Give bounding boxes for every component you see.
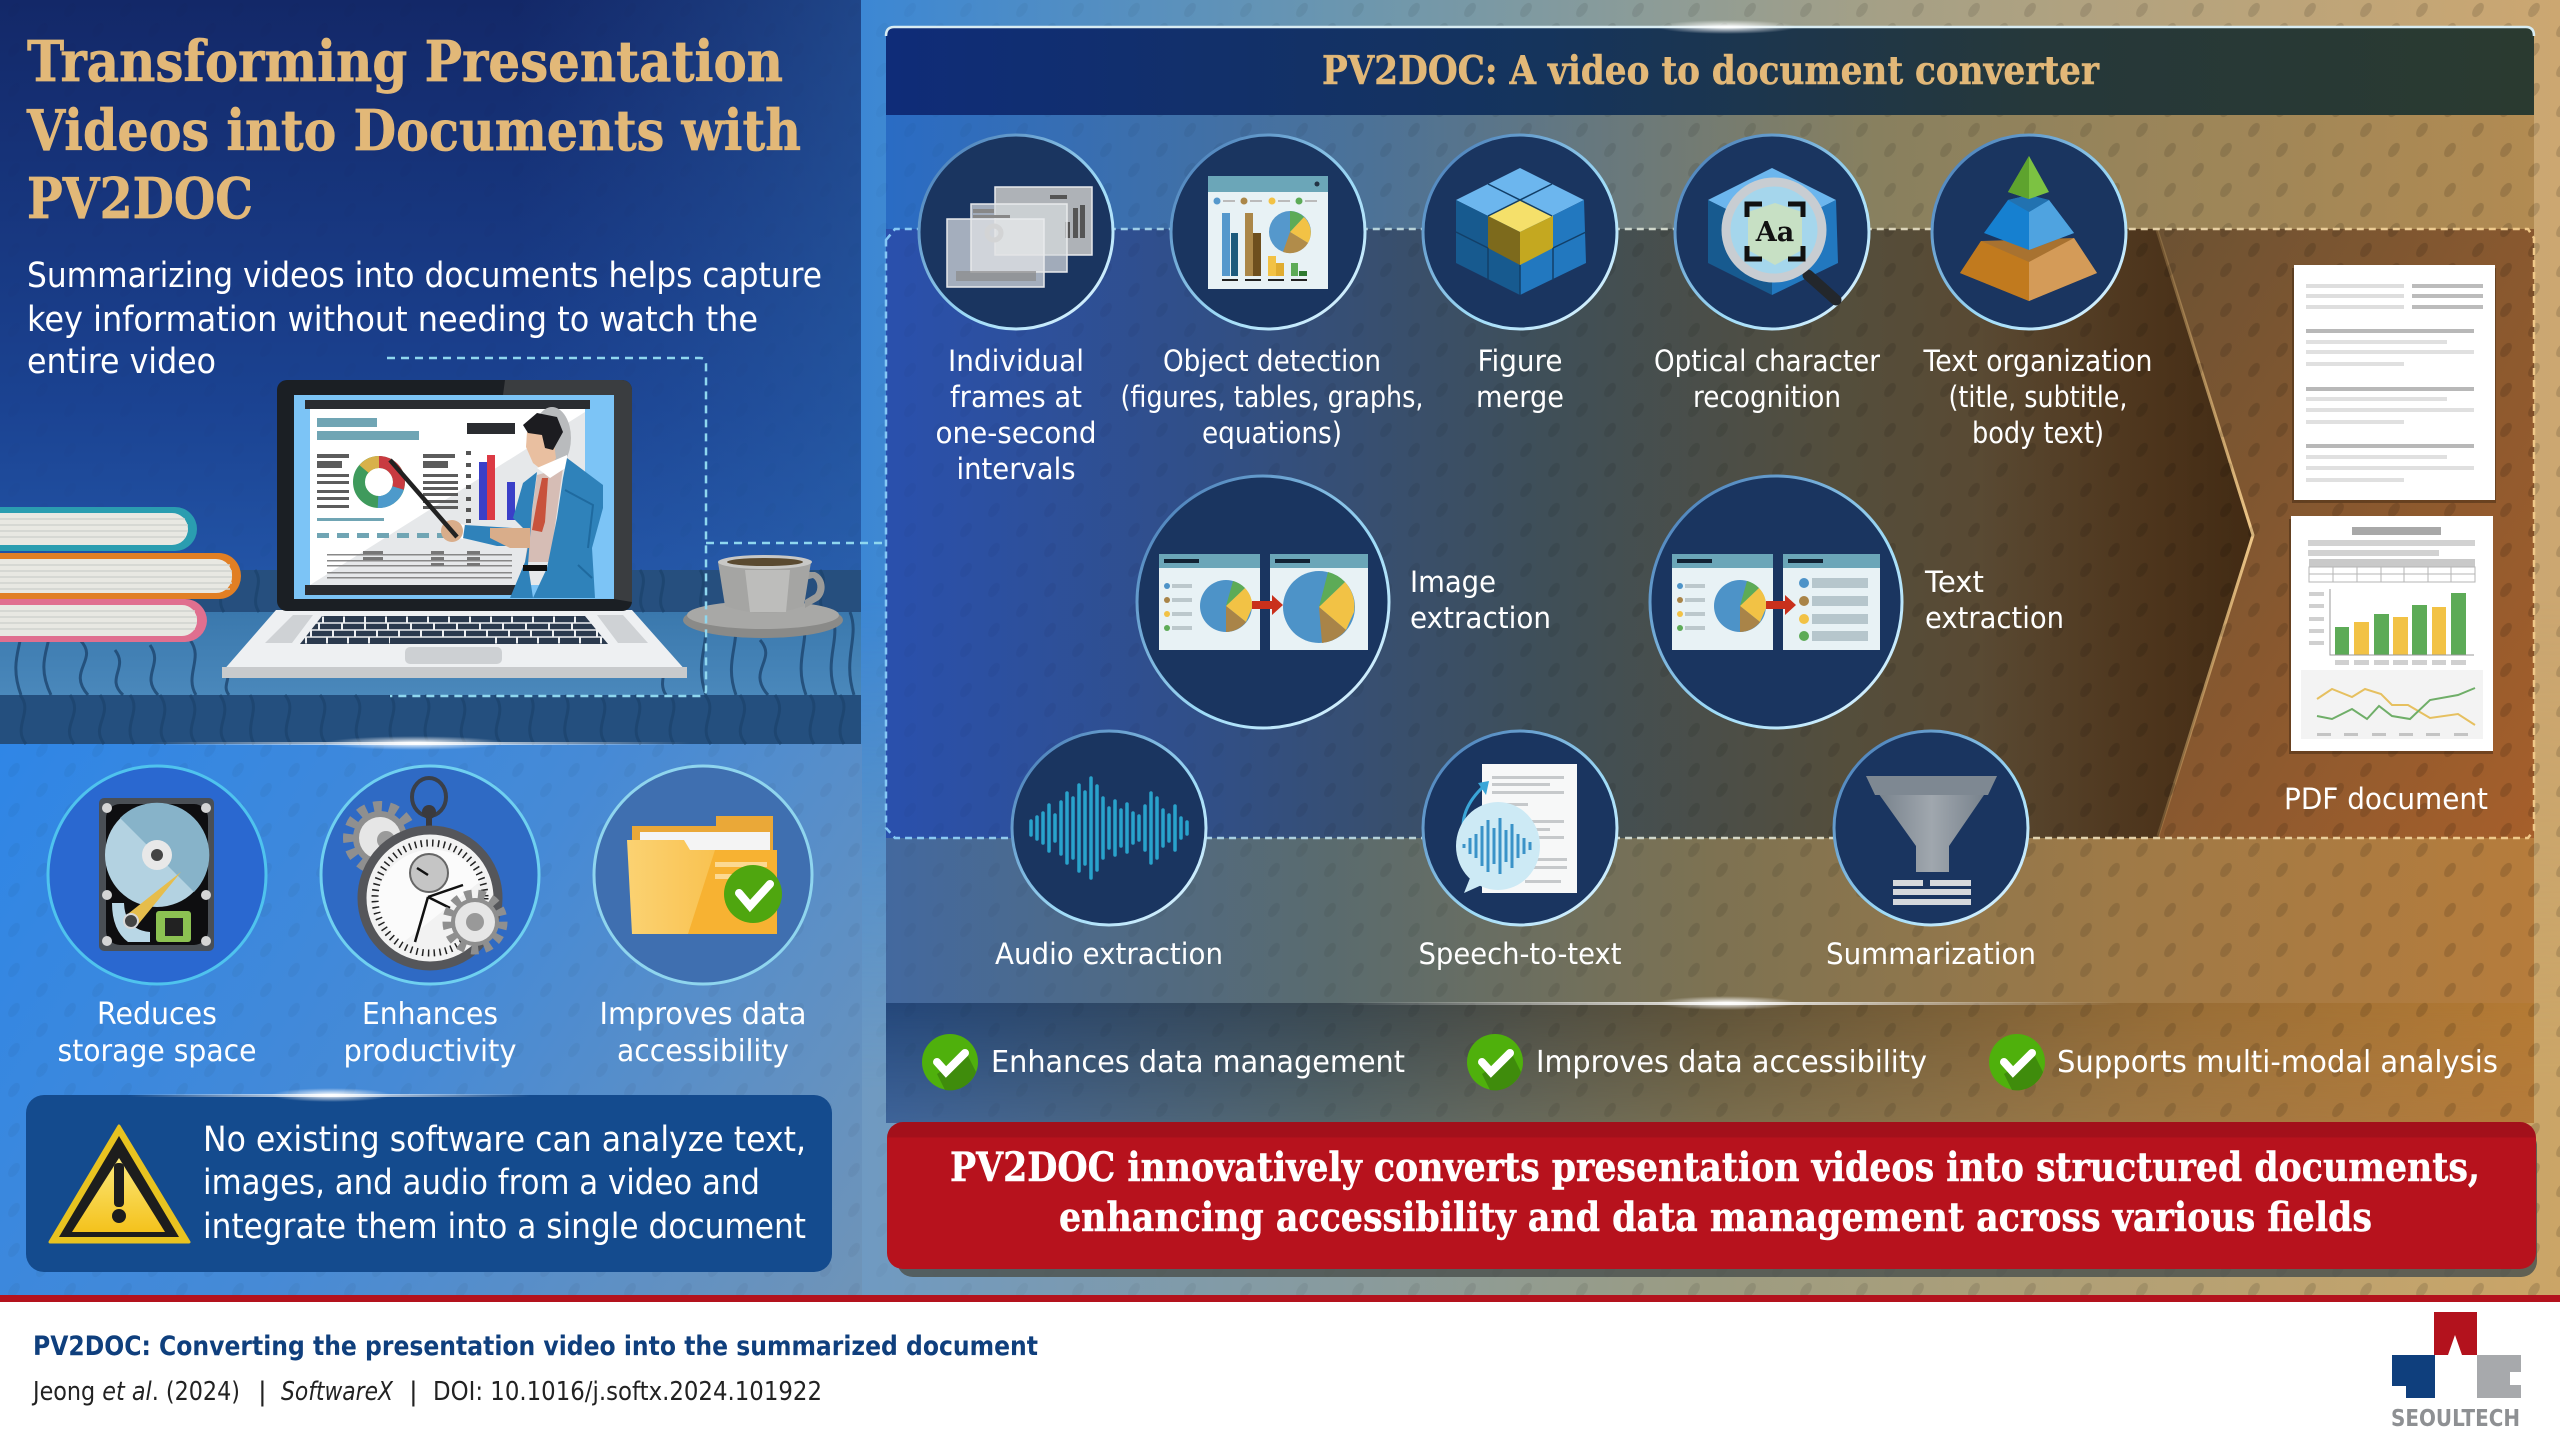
step: text extraction	[1650, 476, 2064, 728]
step: figure merge: Figure	[1478, 344, 1562, 378]
benefit: reduces storage space: storage space	[58, 1034, 256, 1069]
benefit item: multi-modal analysis	[1989, 1034, 2498, 1090]
output: PDF document	[2284, 265, 2496, 816]
glow highlight	[1340, 996, 2120, 1010]
step: image extraction	[1137, 476, 1551, 728]
panel: left intro	[0, 0, 886, 750]
callout text	[203, 1120, 806, 1247]
icon: sound waveform	[1031, 778, 1187, 878]
benefit item: data accessibility	[1467, 1034, 1927, 1090]
icon: magnifier over cube: Aa	[1755, 217, 1794, 248]
panel: benefits	[48, 766, 812, 1069]
step: individual frames: Individual	[948, 344, 1084, 378]
illustration: desk scene	[0, 358, 886, 750]
icon: warning triangle	[50, 1126, 189, 1242]
conclusion banner	[887, 1122, 2537, 1277]
step: optical character recognition: Optical character	[1654, 344, 1880, 378]
benefit: reduces storage space	[48, 766, 266, 1069]
benefit: improves data accessibility: accessibility	[617, 1034, 789, 1069]
footer title: PV2DOC: Converting the presentation video into the summarized document	[33, 1331, 1038, 1362]
dashed frame connector	[387, 358, 886, 696]
icon: merged cube	[1456, 168, 1586, 295]
icon: stopwatch with gears	[350, 778, 502, 966]
step: speech-to-text: Speech-to-text	[1418, 937, 1622, 971]
benefit item: data management	[922, 1034, 1405, 1090]
benefit item: data accessibility: Improves data accessibility	[1536, 1045, 1927, 1080]
step: object detection: Object detection	[1163, 344, 1381, 378]
citation: SoftwareX	[281, 1377, 394, 1407]
citation: |	[409, 1377, 418, 1407]
citation: DOI: 10.1016/j.softx.2024.101922	[433, 1377, 822, 1407]
icon: funnel	[1866, 776, 1997, 905]
presenter	[441, 407, 603, 598]
icon: stacked frames	[947, 187, 1092, 287]
step: individual frames: one-second	[936, 416, 1096, 450]
callout: problem statement	[26, 1088, 832, 1272]
step: object detection: equations)	[1202, 416, 1342, 450]
benefit: enhances productivity: productivity	[344, 1034, 516, 1069]
subtitle text: entire video	[27, 342, 216, 382]
panel: PV2DOC converter	[886, 20, 2537, 1277]
step: individual frames: frames at	[950, 380, 1082, 414]
icon: text extraction panels	[1672, 554, 1880, 650]
step: figure merge	[1423, 135, 1617, 414]
icon: dashboard chart	[1208, 176, 1328, 289]
icon: layered pyramid	[1960, 156, 2097, 301]
step: text extraction: Text	[1924, 565, 1984, 599]
step: audio extraction	[995, 731, 1223, 971]
step: audio extraction: Audio extraction	[995, 937, 1223, 971]
subtitle text: Summarizing videos into documents helps capture	[27, 256, 822, 296]
conclusion banner: enhancing accessibility and data management across various fields	[1059, 1194, 2372, 1241]
step: image extraction: extraction	[1410, 601, 1551, 635]
step: object detection: (figures, tables, graphs,	[1120, 380, 1424, 414]
step: text organization: body text)	[1972, 416, 2104, 450]
glow highlight	[150, 736, 690, 750]
output: PDF document: PDF document	[2284, 782, 2488, 816]
icon: folder with check	[627, 816, 782, 934]
step: figure merge: merge	[1476, 380, 1564, 414]
benefit: enhances productivity: Enhances	[362, 997, 498, 1032]
icon: speech bubble and document	[1456, 764, 1577, 893]
benefit item: data management: Enhances data management	[991, 1045, 1405, 1080]
benefit: enhances productivity	[321, 766, 539, 1069]
step: object detection	[1120, 135, 1424, 450]
title: PV2DOC	[27, 166, 253, 232]
icon: magnifier over cube	[1708, 168, 1838, 300]
step: optical character recognition: recognition	[1693, 380, 1841, 414]
citation: Jeong et al. (2024)	[31, 1377, 240, 1407]
icon: image extraction panels	[1159, 554, 1368, 650]
desk table	[0, 570, 861, 744]
step: text extraction: extraction	[1925, 601, 2064, 635]
benefit: reduces storage space: Reduces	[97, 997, 217, 1032]
coffee cup	[683, 555, 843, 638]
step: individual frames: intervals	[956, 452, 1076, 486]
step: optical character recognition	[1654, 135, 1880, 414]
logo: SeoulTech	[2391, 1312, 2521, 1432]
benefit: improves data accessibility	[594, 766, 812, 1069]
step: text organization	[1923, 135, 2152, 450]
panel header	[886, 20, 2534, 115]
stacked books	[0, 507, 241, 642]
chevron arrow toward PDF	[1980, 229, 2534, 838]
document page: chart	[2289, 516, 2493, 754]
benefit: improves data accessibility: Improves data	[600, 997, 806, 1032]
benefit item: multi-modal analysis: Supports multi-modal analysis	[2057, 1045, 2498, 1080]
citation: |	[258, 1377, 267, 1407]
step: speech-to-text	[1418, 731, 1622, 971]
step: summarization: Summarization	[1826, 937, 2036, 971]
step: text organization: (title, subtitle,	[1948, 380, 2128, 414]
callout text: integrate them into a single document	[203, 1207, 806, 1247]
callout text: No existing software can analyze text,	[203, 1120, 806, 1160]
dashed process frame	[886, 229, 2534, 838]
title: Videos into Documents with	[26, 98, 801, 164]
header background	[0, 0, 861, 744]
icon: hard drive	[99, 798, 214, 951]
citation	[31, 1377, 822, 1407]
step: summarization	[1826, 731, 2036, 971]
subtitle text: key information without needing to watch the	[27, 300, 758, 340]
title: Transforming Presentation	[27, 29, 783, 95]
document page: text	[2292, 265, 2496, 503]
step: text organization: Text organization	[1923, 344, 2152, 378]
subtitle text	[27, 256, 822, 382]
logo: SeoulTech: SEOULTECH	[2391, 1406, 2520, 1432]
panel header: PV2DOC: A video to document converter	[1322, 48, 2099, 94]
laptop	[222, 380, 687, 678]
footer	[0, 1295, 2560, 1440]
panel bands	[886, 115, 2534, 1123]
panel dot texture	[1248, 115, 2534, 1117]
callout text: images, and audio from a video and	[203, 1163, 760, 1203]
step: individual frames	[919, 135, 1113, 486]
step: image extraction: Image	[1410, 565, 1496, 599]
title	[26, 29, 801, 232]
